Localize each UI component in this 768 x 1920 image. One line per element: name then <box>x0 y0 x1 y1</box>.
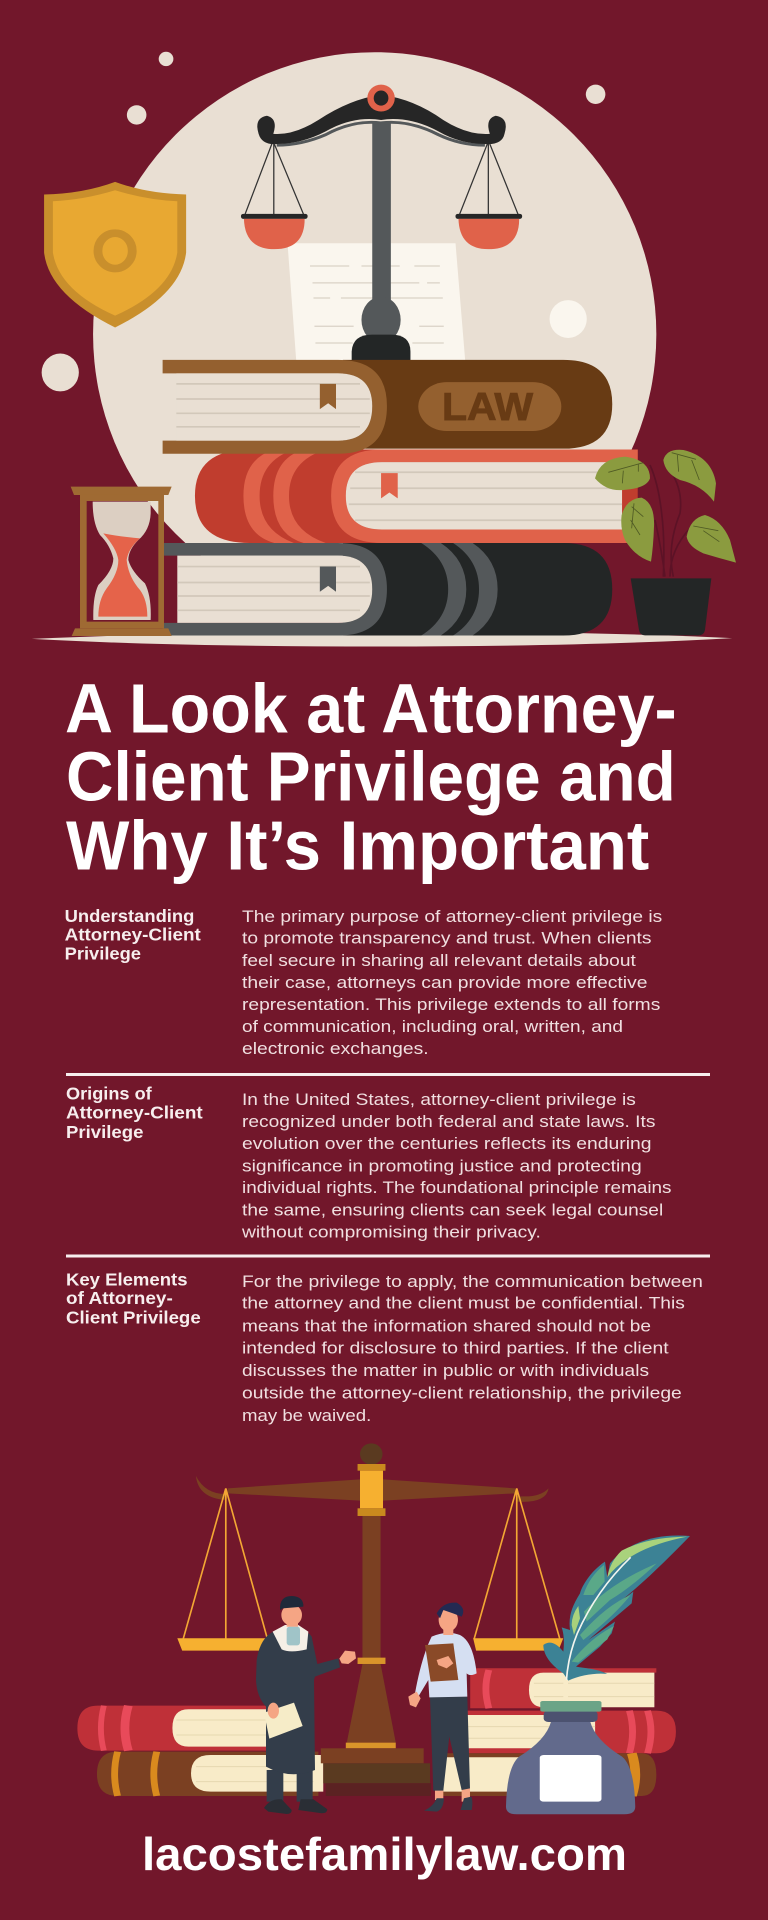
body text: understanding: their case, attorneys can provide more effective <box>242 973 648 992</box>
website: lacostefamilylaw.com <box>142 1828 627 1880</box>
body text: understanding: to promote transparency and trust. When clients <box>242 929 652 948</box>
potted plant <box>595 450 736 635</box>
justice scale <box>177 1443 563 1796</box>
section heading: key elements: of Attorney- <box>66 1288 173 1308</box>
section heading: key elements: Client Privilege <box>66 1308 201 1328</box>
body text: understanding: representation. This privilege extends to all forms <box>242 995 660 1014</box>
ground ellipse <box>32 631 732 647</box>
bottom illustration: justice scale, lawyers, books, quill <box>77 1443 690 1880</box>
document <box>288 243 465 362</box>
body text: origins: the same, ensuring clients can seek legal counsel <box>242 1200 663 1220</box>
body text: origins: evolution over the centuries reflects its enduring <box>242 1134 652 1153</box>
ink bottle <box>506 1701 635 1814</box>
body text: origins <box>241 1090 671 1241</box>
book: black <box>163 543 612 636</box>
body text: key elements: the attorney and the client must be confidential. This <box>242 1294 685 1313</box>
title: Why It’s Important <box>66 806 649 884</box>
section heading: origins: Privilege <box>66 1122 144 1142</box>
book stack: right <box>441 1668 676 1796</box>
title: A Look at Attorney- <box>65 670 677 748</box>
book: red <box>195 450 638 543</box>
body text: key elements <box>242 1272 703 1425</box>
section heading: understanding: Attorney-Client <box>65 925 201 945</box>
body text: key elements: outside the attorney-client relationship, the privilege <box>242 1384 682 1403</box>
body text: origins: individual rights. The foundational principle remains <box>242 1178 672 1197</box>
shield <box>44 182 186 327</box>
body text: understanding: The primary purpose of attorney-client privilege is <box>242 907 662 926</box>
body text: understanding: feel secure in sharing all relevant details about <box>242 951 636 970</box>
section heading: key elements: Key Elements <box>66 1269 188 1289</box>
balance scale <box>241 85 522 361</box>
hourglass <box>71 487 172 636</box>
section heading: origins: Origins of <box>66 1084 152 1104</box>
body text: origins: recognized under both federal and state laws. Its <box>242 1112 655 1131</box>
man in robe <box>256 1596 356 1814</box>
body text: key elements: For the privilege to apply, the communication between <box>242 1272 703 1291</box>
feather quill <box>543 1535 690 1701</box>
section heading: understanding: Privilege <box>65 944 141 964</box>
body text: understanding <box>242 907 662 1058</box>
top illustration: law books and scale <box>32 52 736 647</box>
section heading: understanding <box>65 906 201 964</box>
book stack: left <box>77 1706 323 1796</box>
decorative dots <box>42 52 605 391</box>
section heading: key elements <box>66 1269 201 1328</box>
body text: understanding: of communication, including oral, written, and <box>242 1017 623 1036</box>
body text: origins: significance in promoting justice and protecting <box>242 1156 642 1175</box>
woman with clipboard <box>408 1603 477 1812</box>
body text: key elements: may be waived. <box>242 1406 371 1425</box>
body text: origins: without compromising their privacy. <box>241 1222 541 1241</box>
background circle <box>93 52 656 616</box>
body text: key elements: intended for disclosure to third parties. If the client <box>242 1339 669 1358</box>
law label: LAW <box>442 386 533 429</box>
body text: key elements: means that the information shared should not be <box>242 1316 651 1335</box>
book: brown law <box>163 360 612 454</box>
section heading: origins: Attorney-Client <box>66 1103 203 1123</box>
title <box>65 670 677 884</box>
section heading: origins <box>66 1084 203 1142</box>
body text: understanding: electronic exchanges. <box>242 1039 429 1058</box>
body text: key elements: discusses the matter in public or with individuals <box>242 1361 649 1380</box>
title: Client Privilege and <box>66 738 676 816</box>
section heading: understanding: Understanding <box>65 906 194 926</box>
body text: origins: In the United States, attorney-client privilege is <box>242 1090 636 1109</box>
